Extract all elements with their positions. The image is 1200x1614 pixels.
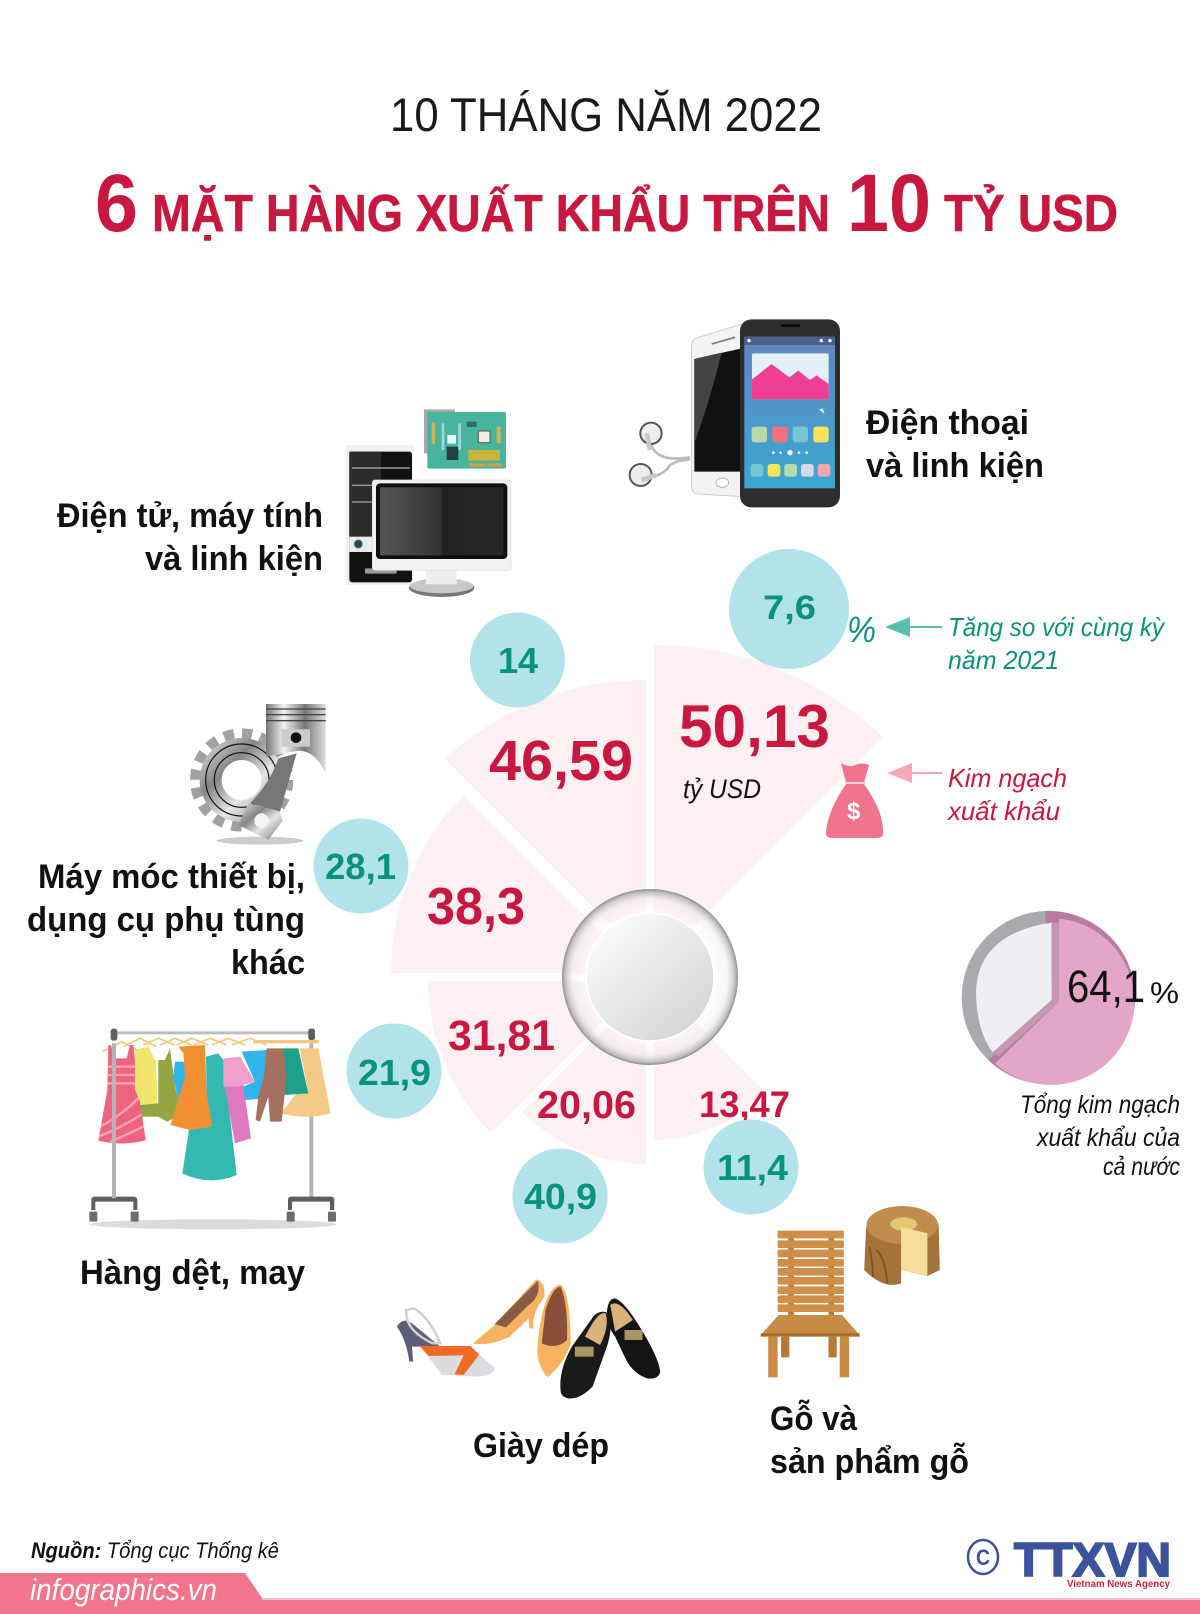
value: 13,47: 13,47 [699, 1084, 790, 1125]
growth bubble: 7,6: 7,6 [763, 589, 816, 627]
unit label: tỷ USD [683, 774, 761, 804]
label: machinery [27, 858, 305, 982]
label: machinery: Máy móc thiết bị, [38, 858, 305, 896]
growth bubble: 40,9 [512, 1148, 608, 1244]
label: wood: Gỗ và [770, 1400, 857, 1438]
label: textiles: Hàng dệt, may [80, 1254, 305, 1292]
value: 38,3: 38,3 [427, 878, 525, 936]
title: period: 10 THÁNG NĂM 2022 [390, 88, 822, 141]
radial sector chart [391, 645, 883, 1164]
arrow: growth legend [885, 617, 942, 637]
value: 50,13: 50,13 [679, 693, 830, 760]
growth bubble: 7,6 [729, 549, 849, 669]
label: electronics [57, 497, 323, 578]
icon: money bag [826, 763, 883, 838]
label: wood [770, 1400, 969, 1481]
value: 20,06: 20,06 [537, 1084, 636, 1127]
label: phones [866, 404, 1044, 485]
growth bubble: 28,1: 28,1 [325, 846, 396, 887]
legend: export value [946, 763, 1067, 826]
label: footwear: Giày dép [473, 1427, 609, 1465]
title: headline [95, 158, 1118, 249]
icon: phones and earphones [630, 319, 840, 507]
icon: clothes rack [89, 1029, 337, 1229]
footer band [0, 1573, 1200, 1614]
pie value: 64,1 [1067, 961, 1145, 1012]
label: electronics: Điện tử, máy tính [57, 497, 323, 535]
growth bubble: 21,9: 21,9 [358, 1052, 431, 1093]
pie caption [1020, 1091, 1180, 1181]
logo: TTXVN: Vietnam News Agency [1067, 1578, 1170, 1590]
title: headline: TỶ USD [944, 184, 1118, 243]
pie chart: 64,1% share [962, 911, 1135, 1085]
arrow: value legend [887, 763, 942, 783]
icon: wooden chair and stump [761, 1206, 940, 1377]
icon: money bag: $ [847, 798, 861, 825]
growth bubble: 11,4 [704, 1120, 798, 1214]
label: machinery: khác [231, 944, 305, 982]
label: wood: sản phẩm gỗ [770, 1443, 969, 1481]
growth bubble: 11,4: 11,4 [717, 1147, 788, 1188]
icon: shoes [397, 1279, 660, 1398]
growth bubble: 40,9: 40,9 [524, 1176, 597, 1217]
growth bubble: 21,9 [346, 1024, 442, 1118]
title: headline: 6 [95, 158, 138, 249]
value: 46,59: 46,59 [489, 729, 633, 793]
centre hub [562, 889, 738, 1065]
growth bubble: 28,1 [314, 818, 408, 914]
pie caption: cả nước [1103, 1153, 1180, 1181]
label: phones: Điện thoại [866, 404, 1029, 442]
legend: growth [948, 612, 1166, 675]
title: headline: 10 [847, 158, 931, 249]
label: electronics: và linh kiện [145, 540, 323, 578]
icon: gear and piston [196, 704, 326, 845]
logo: TTXVN: C [976, 1545, 990, 1570]
growth bubble: 14 [470, 612, 565, 708]
title: headline: MẶT HÀNG XUẤT KHẨU TRÊN [152, 184, 830, 243]
source line: Nguồn: Tổng cục Thống kê [31, 1538, 279, 1563]
logo: TTXVN: TTXVN [1014, 1533, 1171, 1586]
label: machinery: dụng cụ phụ tùng [27, 901, 305, 939]
label: phones: và linh kiện [866, 447, 1044, 485]
legend: export value: xuất khẩu [946, 796, 1060, 826]
pie caption: Tổng kim ngạch [1020, 1091, 1180, 1119]
legend: growth: Tăng so với cùng kỳ [948, 612, 1166, 642]
pie caption: xuất khẩu của [1036, 1124, 1180, 1152]
value: 31,81: 31,81 [448, 1012, 555, 1060]
footer site name: infographics.vn [30, 1572, 217, 1607]
pie value: % [1150, 977, 1179, 1010]
percent sign: % [847, 609, 876, 650]
growth bubble: 14: 14 [498, 640, 538, 681]
legend: export value: Kim ngạch [948, 763, 1067, 793]
icon: computer and circuit board [345, 409, 511, 597]
legend: growth: năm 2021 [948, 645, 1059, 675]
